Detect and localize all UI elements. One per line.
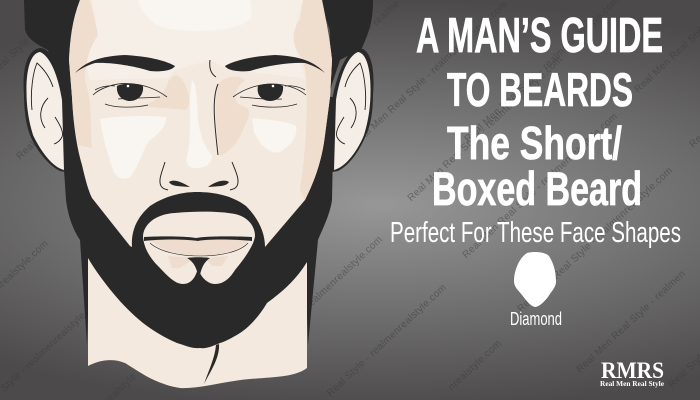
beard [64, 60, 334, 348]
watermarks: Real Men Real Style - realme [293, 0, 402, 101]
right cheek highlight [252, 118, 296, 153]
logo: RMRS: Real Men Real Style [600, 379, 665, 388]
logo: RMRS: RMRS [601, 358, 664, 383]
subheading: the short/boxed beard [432, 117, 642, 215]
mouth and chin area [143, 212, 255, 284]
right ear [332, 48, 374, 172]
lip line [144, 236, 252, 241]
icon: diamond face shape [514, 252, 556, 307]
left cheek highlight [100, 116, 166, 179]
nose highlight [186, 80, 212, 168]
nose shading right [216, 77, 249, 156]
watermarks: Real Style - realmenrealstyle.com [325, 282, 449, 399]
subheading: the short/boxed beard: The Short/ [447, 117, 622, 169]
neck crease [204, 344, 219, 384]
watermarks: Style - realmenrealstyle [0, 310, 88, 394]
watermarks: nrealstyle.com [446, 338, 504, 393]
watermarks: Real [15, 139, 38, 162]
heading: a man's guide to beards [416, 9, 663, 116]
watermarks: Real Men Real Style - realmenrealstyle.com [516, 165, 675, 315]
forehead highlight [138, 0, 252, 31]
neck [80, 240, 318, 388]
hair [24, 0, 373, 100]
label: diamond: Diamond [510, 309, 562, 329]
watermarks: Real Men Real Style - realmenrealstyle.com [226, 234, 385, 384]
illustration: bearded man's face [24, 0, 374, 388]
face skin [69, 0, 332, 247]
watermarks: Real Men Real Style - realmen [575, 268, 688, 375]
watermarks: Real Men Real Style - realmenrealstyle.com [461, 111, 620, 261]
nose [160, 60, 238, 190]
left ear [24, 48, 66, 172]
watermarks: Real Men Real Style - realmenrealstyle.com [406, 54, 565, 204]
eyes [93, 83, 306, 107]
soul patch [187, 257, 210, 280]
nose shading left [145, 75, 189, 110]
lower lip [150, 238, 250, 256]
watermarks: Real Men Real Style - realmenrealstyle.com [351, 0, 510, 149]
eyebrows [75, 55, 325, 73]
